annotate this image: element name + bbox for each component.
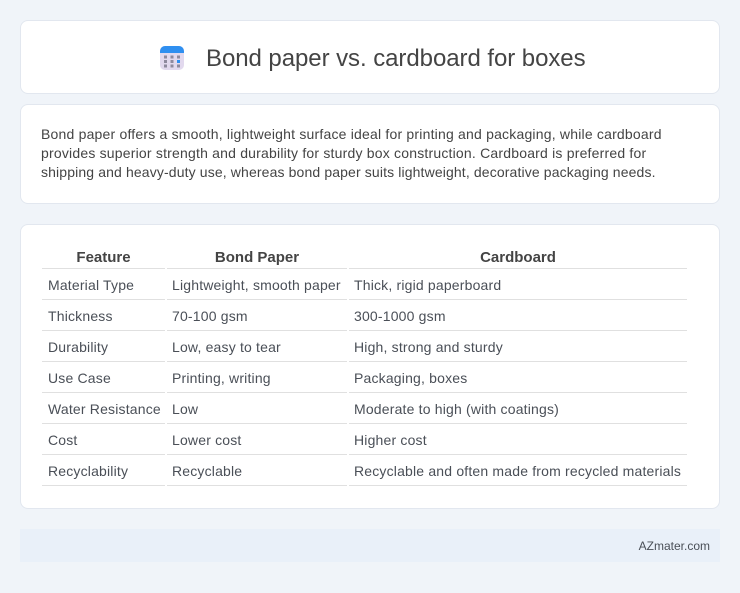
- icon: calendar grid: [160, 46, 184, 70]
- header: Bond Paper: Bond Paper: [215, 249, 299, 266]
- row: Durability: [48, 339, 503, 355]
- header: Cardboard: Cardboard: [480, 249, 556, 266]
- header: Feature: Feature: [76, 249, 131, 266]
- row: Thickness: 70-100 gsm: [172, 308, 248, 324]
- row: Cost: Lower cost: [172, 432, 242, 448]
- row: Use Case: Use Case: [48, 370, 111, 386]
- footer bar: [20, 529, 720, 562]
- row: Thickness: Thickness: [48, 308, 113, 324]
- row: Durability: Durability: [48, 339, 108, 355]
- text block: summary: provides superior strength and durability for sturdy box construction. Cardboard is preferred for: [41, 145, 646, 161]
- row: Water Resistance: Low: [172, 401, 198, 417]
- row: Material Type: Lightweight, smooth paper: [172, 277, 341, 293]
- text block: summary: shipping and heavy-duty use, whereas bond paper suits lightweight, decorative packaging needs.: [41, 164, 656, 180]
- comparison table: [42, 249, 687, 486]
- text block: summary: Bond paper offers a smooth, lightweight surface ideal for printing and packaging, while cardboard: [41, 126, 662, 142]
- text block: summary: [41, 126, 662, 180]
- panel: summary: [20, 104, 720, 204]
- row: Cost: [48, 432, 427, 448]
- row: Material Type: Material Type: [48, 277, 134, 293]
- row: Use Case: [48, 370, 467, 386]
- row: Use Case: Printing, writing: [172, 370, 271, 386]
- row: Water Resistance: Moderate to high (with coatings): [354, 401, 559, 417]
- row: Cost: Cost: [48, 432, 78, 448]
- row: Thickness: 300-1000 gsm: [354, 308, 446, 324]
- panel: title card: [20, 20, 720, 94]
- footer brand text: AZmater.com: [639, 539, 710, 553]
- title: Bond paper vs. cardboard for boxes: [206, 45, 586, 72]
- row: Durability: High, strong and sturdy: [354, 339, 503, 355]
- row: Recyclability: Recyclable and often made from recycled materials: [354, 463, 681, 479]
- row: Material Type: [48, 277, 501, 293]
- row: Water Resistance: Water Resistance: [48, 401, 161, 417]
- row: Recyclability: Recyclability: [48, 463, 128, 479]
- row: Material Type: Thick, rigid paperboard: [354, 277, 501, 293]
- row: Durability: Low, easy to tear: [172, 339, 281, 355]
- row: Thickness: [48, 308, 446, 324]
- row: Recyclability: Recyclable: [172, 463, 242, 479]
- row: Use Case: Packaging, boxes: [354, 370, 467, 386]
- row: Water Resistance: [48, 401, 559, 417]
- panel: comparison table: [20, 224, 720, 509]
- row: Cost: Higher cost: [354, 432, 427, 448]
- row: Recyclability: [48, 463, 681, 479]
